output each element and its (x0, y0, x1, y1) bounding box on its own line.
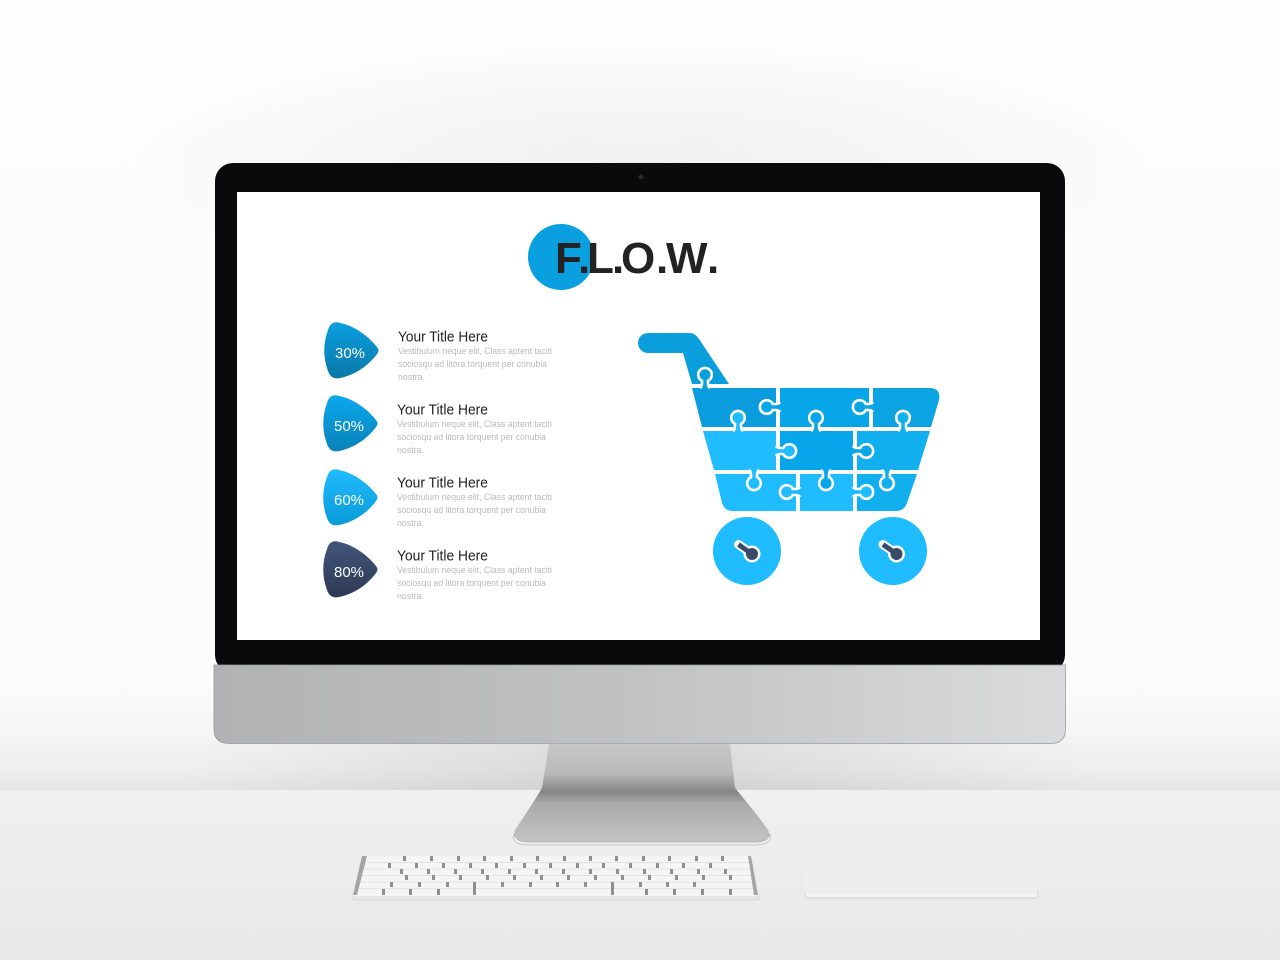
cart handle (638, 333, 729, 384)
title with circle: F.L.O.W. (555, 234, 719, 283)
item 4 text: sociosqu ad litora torquent per conubia (397, 578, 546, 588)
cart row 3 (715, 474, 917, 511)
badge 50%: 50% (334, 418, 364, 435)
item 1: 30% (324, 322, 552, 382)
wall shadow near desk (180, 744, 1100, 790)
monitor stand (513, 744, 771, 845)
key gaps (382, 856, 732, 895)
keyboard (352, 856, 759, 900)
item 2 text (397, 402, 552, 455)
badge 50% (323, 395, 378, 451)
badge 30% (324, 322, 378, 378)
item 4 text: nostra. (397, 591, 424, 601)
wall shading behind monitor (120, 40, 1160, 300)
badge 80% (323, 541, 378, 597)
item 1 text: sociosqu ad litora torquent per conubia (398, 359, 547, 369)
item 2 text: nostra. (397, 445, 424, 455)
item 2: 50% (323, 395, 552, 455)
item 1 text: Your Title Here (398, 330, 488, 346)
badge 30%: 30% (335, 345, 365, 362)
cart row 2 (703, 431, 930, 470)
monitor (214, 163, 1066, 744)
item 3: 60% (323, 469, 552, 528)
left wheel (713, 517, 781, 585)
keyboard side edges (353, 856, 758, 895)
item 4 text (397, 548, 552, 601)
item 1 text: nostra. (398, 372, 425, 382)
screen (237, 192, 1040, 640)
item 2 text: sociosqu ad litora torquent per conubia (397, 432, 546, 442)
webcam (638, 174, 644, 180)
monitor chin (214, 665, 1066, 744)
puzzle tabs (698, 368, 910, 499)
item 1 text (398, 330, 552, 382)
item 2 text: Vestibulum neque elit, Class aptent taciti (397, 419, 552, 429)
keyboard body (353, 856, 758, 896)
item 4 text: Vestibulum neque elit, Class aptent taciti (397, 565, 552, 575)
desk surface (0, 790, 1280, 960)
item 3 text: Your Title Here (397, 476, 488, 492)
cart row 1 (692, 388, 939, 427)
trackpad (797, 853, 1038, 898)
key row lines (358, 862, 757, 888)
badge 80%: 80% (334, 564, 364, 581)
trackpad lip (805, 892, 1038, 898)
badge 60% (323, 469, 378, 525)
keyboard lip (352, 895, 759, 900)
title with circle (528, 224, 719, 290)
item 3 text: sociosqu ad litora torquent per conubia (397, 505, 546, 515)
badge 60%: 60% (334, 492, 364, 509)
puzzle shopping cart (638, 333, 939, 585)
item 3 text: nostra. (397, 518, 424, 528)
right wheel (859, 517, 927, 585)
item 2 text: Your Title Here (397, 402, 488, 418)
item 1 text: Vestibulum neque elit, Class aptent taciti (398, 346, 552, 356)
item 3 text (397, 476, 552, 528)
trackpad top surface (797, 853, 1037, 893)
item 4 text: Your Title Here (397, 548, 488, 564)
item 3 text: Vestibulum neque elit, Class aptent taciti (397, 492, 552, 502)
monitor bezel (215, 163, 1065, 673)
item 4: 80% (323, 541, 552, 601)
